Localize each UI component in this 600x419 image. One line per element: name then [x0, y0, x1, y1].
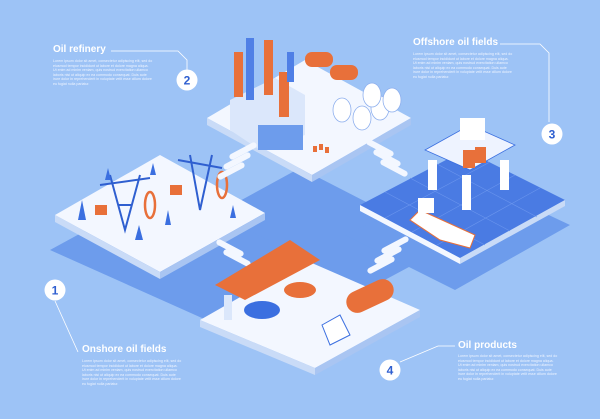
heading: onshore oil fields: Onshore oil fields — [82, 344, 166, 355]
text: offshore: Lorem ipsum dolor sit amet, consectetur adipiscing elit, sed do eiusmod tempor incididunt ut labore et dolore magna aliqua. Ut enim ad minim veniam, quis nostrud exercitation ullamco laboris nisi ut aliquip ex ea commodo consequat. Duis aute irure dolor in reprehenderit in voluptate velit esse cillum dolore eu fugiat nulla pariatur. — [413, 52, 512, 79]
number circles: 1 — [52, 284, 59, 298]
text: oil products: Lorem ipsum dolor sit amet, consectetur adipiscing elit, sed do eiusmod tempor incididunt ut labore et dolore magna aliqua. Ut enim ad minim veniam, quis nostrud exercitation ullamco laboris nisi ut aliquip ex ea commodo consequat. Duis aute irure dolor in reprehenderit in voluptate velit esse cillum dolore eu fugiat nulla pariatur. — [458, 354, 557, 381]
central shadow — [50, 168, 570, 335]
heading: oil refinery: Oil refinery — [53, 44, 106, 55]
stairs — [215, 138, 410, 275]
platform: offshore oil fields — [360, 118, 565, 264]
pump jacks — [100, 155, 222, 230]
platform: onshore oil fields — [55, 155, 265, 279]
platform: oil products — [200, 240, 420, 375]
number circles — [44, 70, 562, 380]
platform: oil refinery — [207, 38, 411, 182]
number circles: 2 — [184, 74, 191, 88]
number circles: 4 — [387, 364, 394, 378]
heading: offshore oil fields: Offshore oil fields — [413, 37, 498, 48]
number circles: 3 — [549, 128, 556, 142]
connector lines — [55, 44, 549, 362]
text: oil refinery: Lorem ipsum dolor sit amet, consectetur adipiscing elit, sed do eiusmod tempor incididunt ut labore et dolore magna aliqua. Ut enim ad minim veniam, quis nostrud exercitation ullamco laboris nisi ut aliquip ex ea commodo consequat. Duis aute irure dolor in reprehenderit in voluptate velit esse cillum dolore eu fugiat nulla pariatur. — [53, 59, 152, 86]
heading: oil products: Oil products — [458, 340, 517, 351]
text: onshore: Lorem ipsum dolor sit amet, consectetur adipiscing elit, sed do eiusmod tempor incididunt ut labore et dolore magna aliqua. Ut enim ad minim veniam, quis nostrud exercitation ullamco laboris nisi ut aliquip ex ea commodo consequat. Duis aute irure dolor in reprehenderit in voluptate velit esse cillum dolore eu fugiat nulla pariatur. — [82, 359, 181, 386]
